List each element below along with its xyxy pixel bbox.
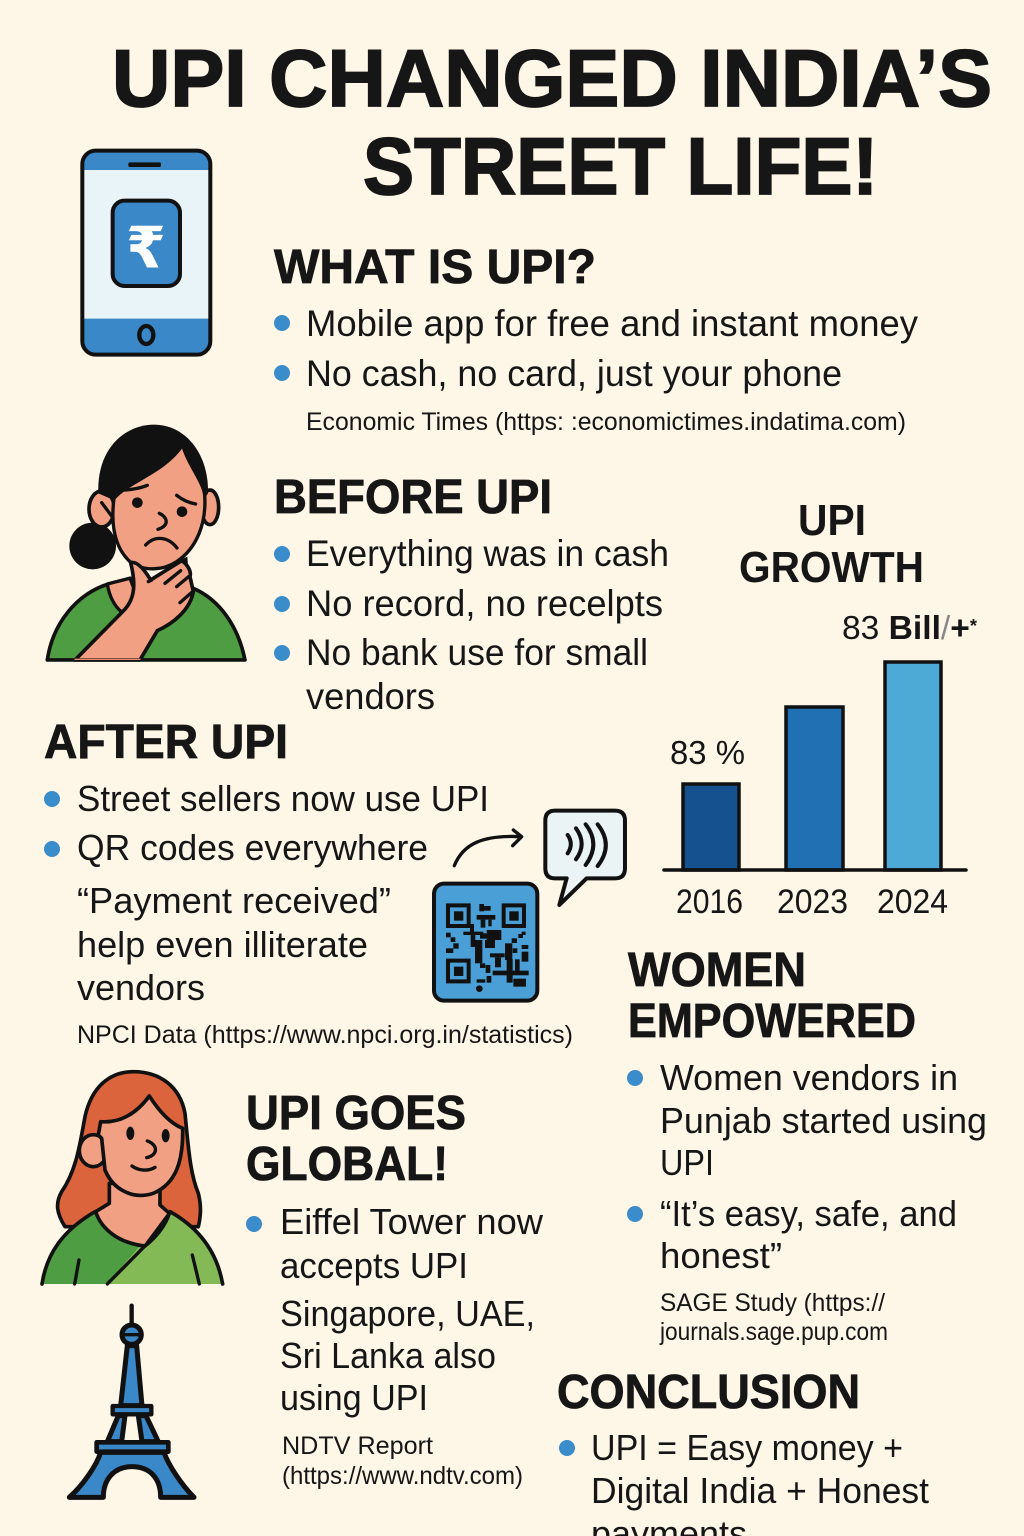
icon: Eiffel Tower (69, 1306, 194, 1497)
section: conclusion: CONCLUSION (557, 1366, 860, 1419)
section: women empowered: EMPOWERED (628, 995, 916, 1048)
section: UPI goes global: Eiffel Tower now (280, 1201, 544, 1242)
section: women empowered: Women vendors in (660, 1057, 958, 1098)
section: UPI goes global: Singapore, UAE, (280, 1293, 535, 1334)
section: UPI goes global: GLOBAL! (246, 1138, 448, 1191)
title: UPI CHANGED INDIA’S (112, 34, 992, 124)
section: conclusion: Digital India + Honest (591, 1470, 929, 1511)
section: after UPI: Street sellers now use UPI (77, 778, 489, 819)
section: UPI goes global: accepts UPI (280, 1245, 468, 1286)
section: what is UPI: Economic Times (https: :economictimes.indatima.com) (306, 408, 906, 436)
section: what is UPI (274, 241, 918, 436)
icon: phone with rupee app (82, 151, 210, 355)
section: after UPI: AFTER UPI (44, 716, 288, 769)
section: after UPI: “Payment received” (77, 880, 391, 921)
bar chart: UPI growth: UPI (798, 496, 866, 545)
section: UPI goes global: using UPI (280, 1377, 428, 1418)
bar chart: UPI growth: 2016 (676, 883, 743, 921)
section: what is UPI: No cash, no card, just your phone (306, 353, 842, 394)
section: UPI goes global: Sri Lanka also (280, 1335, 496, 1376)
section: women empowered (627, 944, 987, 1346)
section: women empowered: SAGE Study (https:// (660, 1289, 885, 1317)
section: after UPI: vendors (77, 967, 205, 1008)
bar chart: UPI growth: 83 % (670, 734, 745, 771)
section: before UPI (274, 471, 669, 717)
icon: phone with rupee app: ₹ (126, 214, 166, 281)
section: after UPI (44, 716, 573, 1049)
section: women empowered: journals.sage.pup.com (659, 1318, 888, 1346)
bar chart: UPI growth: 2023 (777, 883, 848, 921)
bar chart: UPI growth: 2024 (877, 883, 948, 921)
section: UPI goes global: (https://www.ndtv.com) (282, 1462, 523, 1490)
icon: worried woman (47, 425, 245, 660)
section: after UPI: QR codes everywhere (77, 827, 428, 868)
section: before UPI: vendors (306, 676, 435, 717)
section: before UPI: No bank use for small (306, 632, 648, 673)
section: women empowered: “It’s easy, safe, and (660, 1193, 957, 1234)
section: before UPI: No record, no recelpts (306, 583, 663, 624)
bar chart: UPI growth (664, 496, 977, 921)
section: after UPI: help even illiterate (77, 924, 368, 965)
section: conclusion (557, 1366, 929, 1536)
section: UPI goes global: UPI GOES (246, 1087, 466, 1140)
icon: smiling woman (42, 1072, 223, 1284)
section: before UPI: BEFORE UPI (274, 471, 552, 524)
bar chart: UPI growth: 83 Bill/+ (842, 609, 970, 646)
title (112, 34, 992, 212)
section: UPI goes global (246, 1087, 544, 1490)
bar chart: UPI growth: * (970, 616, 977, 636)
section: UPI goes global: NDTV Report (282, 1432, 433, 1460)
title: STREET LIFE! (363, 122, 878, 212)
section: what is UPI: WHAT IS UPI? (274, 241, 596, 294)
section: after UPI: NPCI Data (https://www.npci.org.in/statistics) (77, 1021, 573, 1049)
icon: QR code, arrow and sound bubble (434, 811, 625, 1001)
section: women empowered: Punjab started using (660, 1100, 987, 1141)
section: what is UPI: Mobile app for free and instant money (306, 303, 918, 344)
section: women empowered: honest” (660, 1235, 782, 1276)
section: women empowered: UPI (660, 1142, 714, 1183)
section: conclusion: UPI = Easy money + (591, 1427, 903, 1468)
section: before UPI: Everything was in cash (306, 533, 669, 574)
bar chart: UPI growth: GROWTH (739, 543, 924, 592)
section: women empowered: WOMEN (628, 944, 806, 997)
